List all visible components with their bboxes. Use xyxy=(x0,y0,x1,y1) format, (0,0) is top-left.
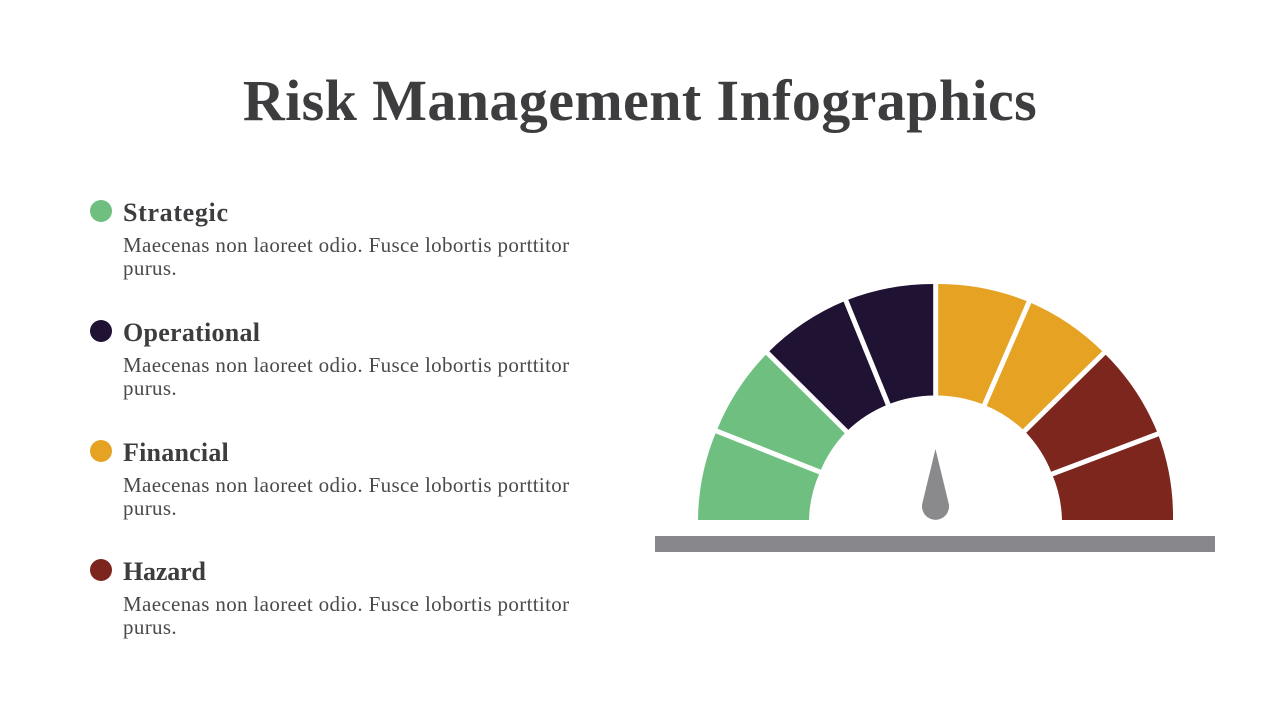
text: Financial description: Maecenas non laoreet odio. Fusce lobortis porttitor purus. xyxy=(123,473,570,520)
legend item: Financial xyxy=(90,438,570,520)
segment: amber 1 xyxy=(936,284,1029,405)
legend item: Strategic xyxy=(90,198,570,280)
heading: Strategic: Strategic xyxy=(123,198,229,227)
icon: amber dot xyxy=(90,440,112,462)
segment: green 1 xyxy=(698,431,820,520)
legend item: Operational xyxy=(90,318,570,400)
heading: Financial: Financial xyxy=(123,438,229,467)
icon: dark purple dot xyxy=(90,320,112,342)
heading: Hazard: Hazard xyxy=(123,557,206,586)
segment: purple 2 xyxy=(846,284,936,404)
heading: Operational: Operational xyxy=(123,318,260,347)
segment: red 1 xyxy=(1024,353,1158,474)
gauge needle xyxy=(922,449,949,520)
icon: green dot xyxy=(90,200,112,222)
text: Strategic description: Maecenas non laoreet odio. Fusce lobortis porttitor purus. xyxy=(123,233,570,280)
gauge base bar xyxy=(655,536,1215,552)
text: Operational description: Maecenas non laoreet odio. Fusce lobortis porttitor purus. xyxy=(123,353,570,400)
legend item: Hazard xyxy=(90,557,570,639)
title: Risk Management Infographics xyxy=(243,68,1037,133)
segment: amber 2 xyxy=(984,302,1104,431)
segment: purple 1 xyxy=(768,300,888,432)
text: Hazard description: Maecenas non laoreet odio. Fusce lobortis porttitor purus. xyxy=(123,592,570,639)
segment: red 2 xyxy=(1052,434,1173,520)
icon: dark red dot xyxy=(90,559,112,581)
segment: green 2 xyxy=(716,353,846,472)
gauge segments xyxy=(698,284,1173,520)
